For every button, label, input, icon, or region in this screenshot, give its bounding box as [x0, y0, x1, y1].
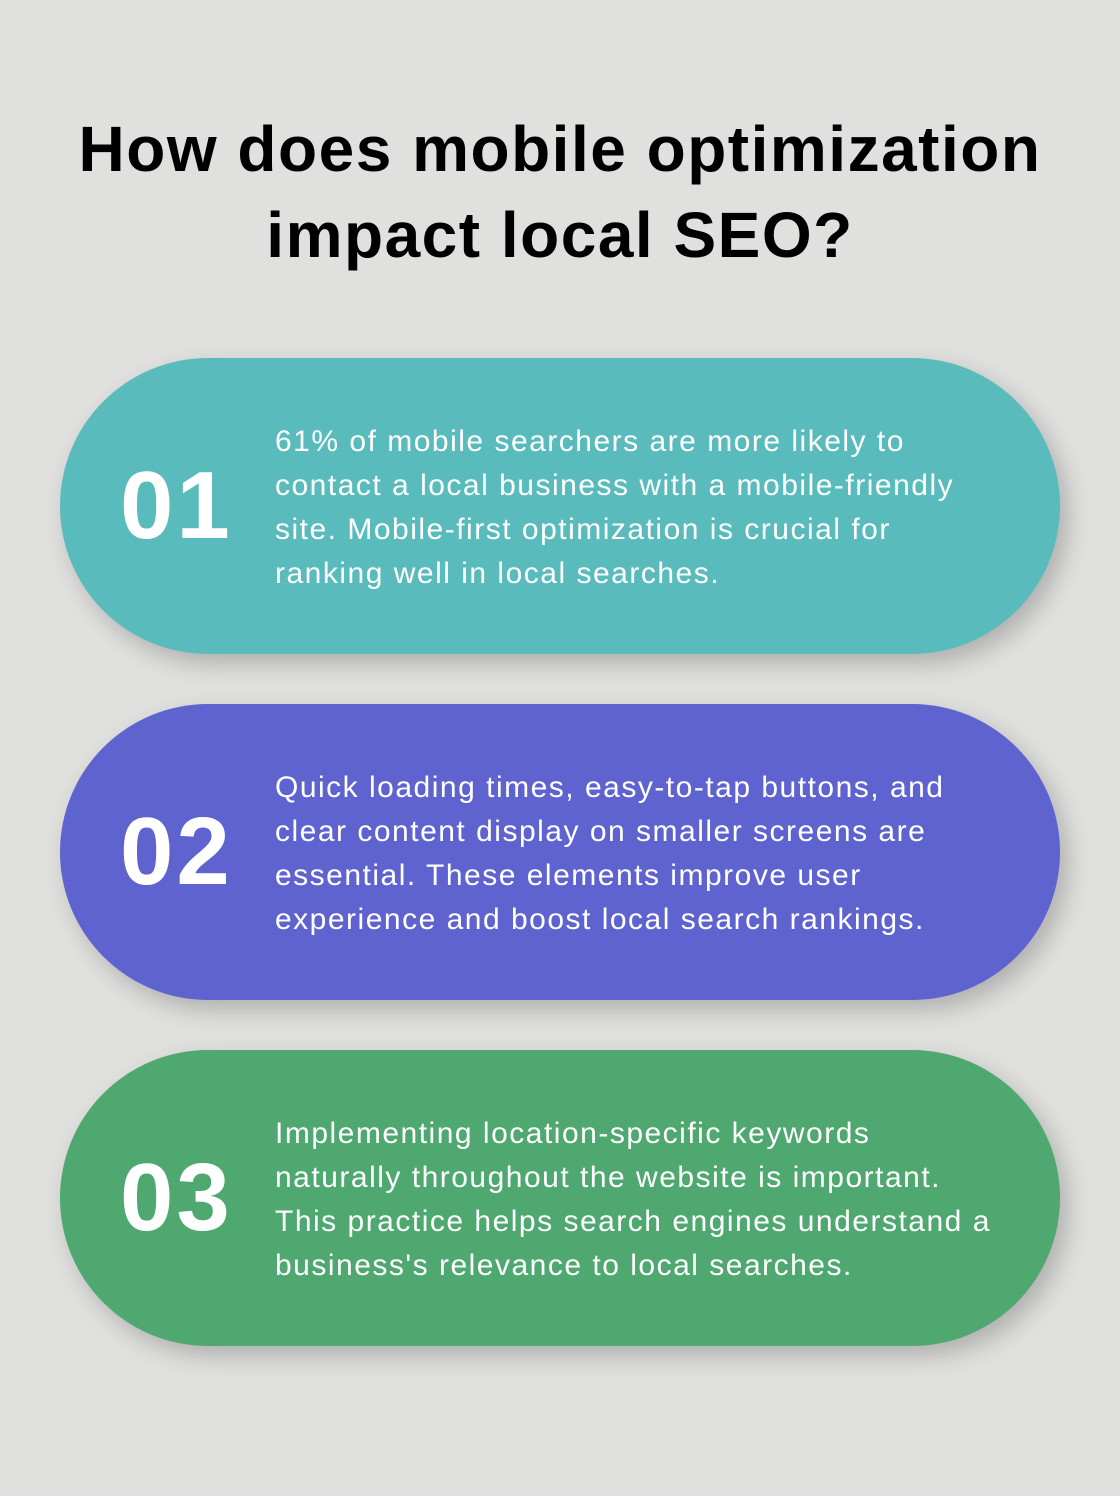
text 02: clear content display on smaller screens are	[275, 815, 926, 848]
panel: 01	[60, 358, 1060, 654]
text 01: 61% of mobile searchers are more likely to	[275, 425, 905, 458]
text 02: essential. These elements improve user	[275, 859, 862, 892]
number 02: 02	[120, 798, 233, 905]
panel: 02	[60, 704, 1060, 1000]
number 03: 03	[120, 1144, 233, 1251]
text 02: experience and boost local search rankings.	[275, 903, 925, 936]
title	[79, 113, 1041, 271]
text 03: Implementing location-specific keywords	[275, 1117, 870, 1150]
text 02: Quick loading times, easy-to-tap buttons, and	[275, 771, 944, 804]
text 01: contact a local business with a mobile-friendly	[275, 469, 954, 502]
title: How does mobile optimization	[79, 113, 1041, 185]
text 03	[275, 1117, 991, 1282]
number 01: 01	[120, 452, 233, 559]
text 03: This practice helps search engines understand a	[275, 1205, 991, 1238]
title: impact local SEO?	[266, 199, 854, 271]
text 01	[275, 425, 954, 590]
text 03: naturally throughout the website is important.	[275, 1161, 941, 1194]
text 02	[275, 771, 944, 936]
text 01: site. Mobile-first optimization is crucial for	[275, 513, 891, 546]
text 01: ranking well in local searches.	[275, 557, 720, 590]
panel: 03	[60, 1050, 1060, 1346]
text 03: business's relevance to local searches.	[275, 1249, 853, 1282]
